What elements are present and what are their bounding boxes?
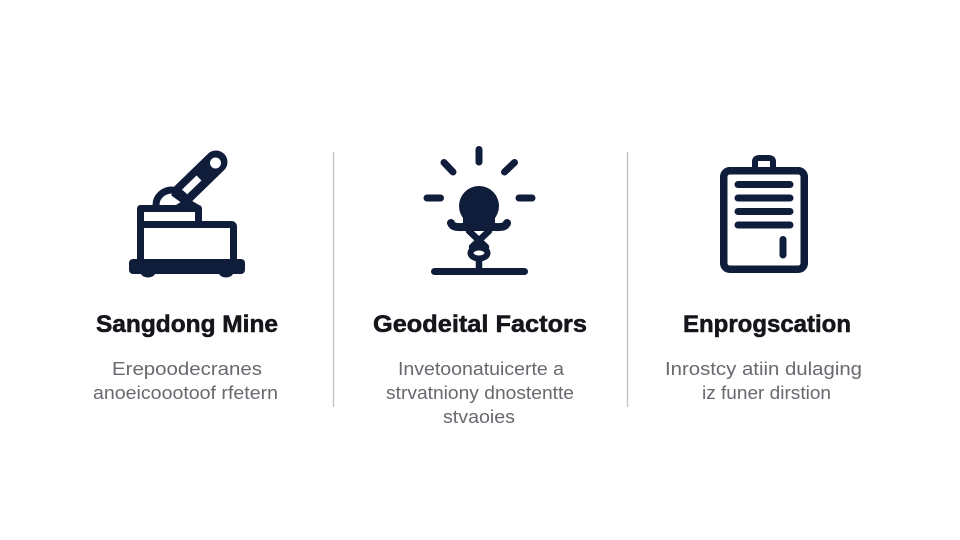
text block: Geodeital description: stvaoies [443, 407, 515, 427]
text block: Geodeital description: Invetoonatuicerte a [398, 359, 565, 379]
text block: Enprogscation description: iz funer dirstion [702, 383, 831, 403]
panel: Sangdong Mine [93, 158, 278, 403]
heading: Enprogscation: Enprogscation [683, 311, 851, 338]
text block: Geodeital description [386, 359, 574, 427]
text block: Sangdong description [93, 359, 278, 403]
heading: Geodeital Factors: Geodeital Factors [373, 311, 587, 338]
text block: Sangdong description: anoeicoootoof rfetern [93, 383, 278, 403]
text block: Enprogscation description: Inrostcy atiin dulaging [665, 359, 862, 379]
text block: Enprogscation description [665, 359, 862, 403]
heading: Sangdong Mine: Sangdong Mine [96, 311, 278, 338]
icon: mine cart with pick [129, 158, 245, 278]
panel: Geodeital Factors [373, 150, 587, 427]
icon: clipboard [724, 158, 804, 269]
panel: Enprogscation [665, 158, 862, 403]
icon: light bulb on stand [427, 150, 532, 272]
text block: Geodeital description: strvatniony dnostentte [386, 383, 574, 403]
text block: Sangdong description: Erepoodecranes [112, 359, 262, 379]
